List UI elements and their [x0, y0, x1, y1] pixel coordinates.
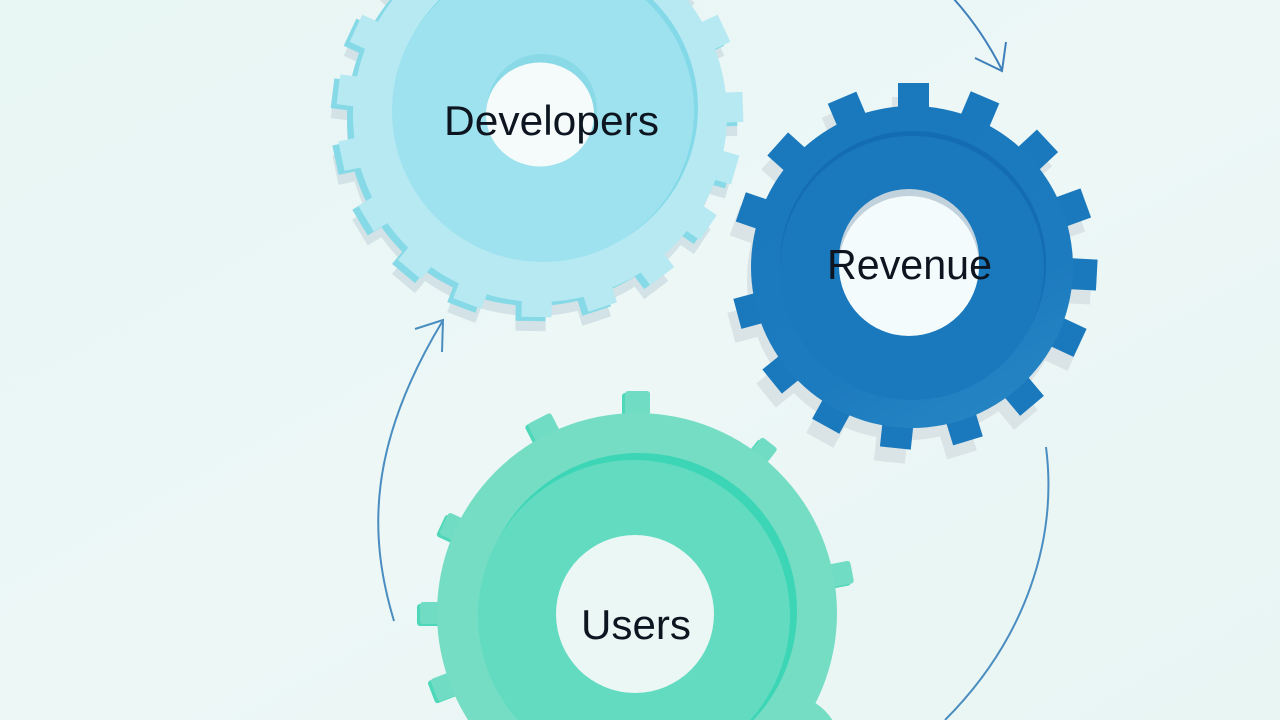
developers gear inner disc [392, 0, 694, 262]
developers gear teeth depth [331, 0, 737, 321]
users label: Users [581, 601, 691, 648]
users gear lower right lug [729, 694, 841, 720]
revenue gear teeth [733, 83, 1098, 450]
revenue gear inner edge [780, 131, 1046, 397]
users gear inner disc [478, 460, 790, 720]
revenue gear inner disc [780, 136, 1044, 400]
revenue gear body [751, 106, 1073, 428]
revenue hole [839, 196, 979, 336]
users gear body [437, 413, 837, 720]
revenue gear shadow [727, 97, 1092, 464]
gear: revenue [727, 83, 1098, 464]
developers gear inner edge [394, 0, 698, 260]
developers gear shadow [331, 0, 737, 331]
users hole [556, 535, 714, 693]
developers gear body [353, 0, 727, 302]
gear: users [417, 391, 854, 720]
arrow: revenue to users [945, 447, 1048, 720]
users gear teeth depth [417, 393, 851, 704]
developers gear teeth [337, 0, 743, 317]
revenue label: Revenue [827, 241, 992, 288]
users gear inner edge [481, 453, 797, 720]
developers hole shadow [487, 54, 597, 164]
developers label: Developers [444, 97, 659, 144]
users gear teeth [420, 391, 854, 702]
arrow: developers to revenue [953, 0, 1006, 71]
developers hole [486, 62, 594, 166]
gear: developers [331, 0, 743, 331]
revenue hole shadow [839, 189, 979, 329]
arrow: users to developers [378, 320, 443, 621]
